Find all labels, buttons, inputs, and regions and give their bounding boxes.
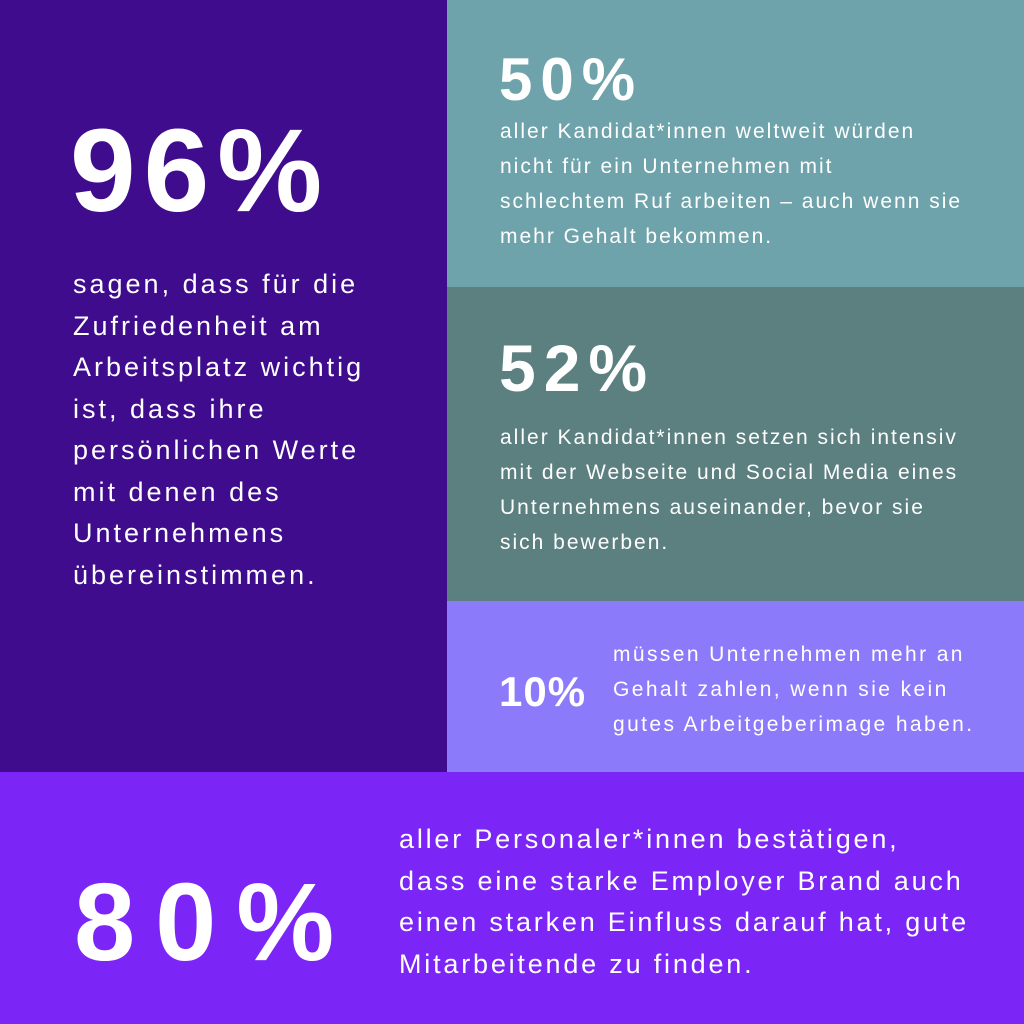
text block: 96% description [73,269,364,590]
panel: 96% [0,0,447,772]
text block: 52% description: Unternehmens auseinander, bevor sie [500,496,925,519]
heading: 96%: 96% [70,105,330,237]
text block: 52% description: sich bewerben. [500,531,669,554]
panel: 50% [447,0,1024,287]
text block: 80% description: aller Personaler*innen bestätigen, [399,824,899,854]
panel: 80% [0,772,1024,1024]
text block: 50% description: schlechtem Ruf arbeiten – auch wenn sie [500,190,962,213]
text block: 96% description: sagen, dass für die [73,269,358,299]
text block: 96% description: Zufriedenheit am [73,310,324,340]
text block: 52% description: aller Kandidat*innen setzen sich intensiv [500,426,958,449]
text block: 80% description: Mitarbeitende zu finden. [399,948,754,978]
text block: 50% description: nicht für ein Unternehmen mit [500,155,833,178]
text block: 50% description: mehr Gehalt bekommen. [500,225,773,248]
heading: 80%: 80% [74,861,354,984]
text block: 80% description: dass eine starke Employer Brand auch [399,866,964,896]
text block: 50% description: aller Kandidat*innen weltweit würden [500,120,915,143]
text block: 10% description: müssen Unternehmen mehr an [613,643,965,666]
text block: 10% description: Gehalt zahlen, wenn sie kein [613,678,949,701]
text block: 10% description: gutes Arbeitgeberimage haben. [613,713,974,736]
panel: 10% [447,601,1024,772]
text block: 80% description: einen starken Einfluss darauf hat, gute [399,907,969,937]
text block: 50% description [500,120,962,248]
text block: 10% description [613,643,974,736]
heading: 52%: 52% [499,331,655,405]
text block: 96% description: persönlichen Werte [73,435,359,465]
heading: 50%: 50% [499,46,643,113]
text block: 96% description: übereinstimmen. [73,560,318,590]
text block: 96% description: Unternehmens [73,518,286,548]
text block: 80% description [399,824,969,978]
panel: 52% [447,287,1024,601]
heading: 10%: 10% [499,668,586,715]
text block: 96% description: mit denen des [73,476,282,506]
text block: 96% description: ist, dass ihre [73,394,267,424]
text block: 96% description: Arbeitsplatz wichtig [73,352,364,382]
text block: 52% description [500,426,958,554]
text block: 52% description: mit der Webseite und Social Media eines [500,461,958,484]
